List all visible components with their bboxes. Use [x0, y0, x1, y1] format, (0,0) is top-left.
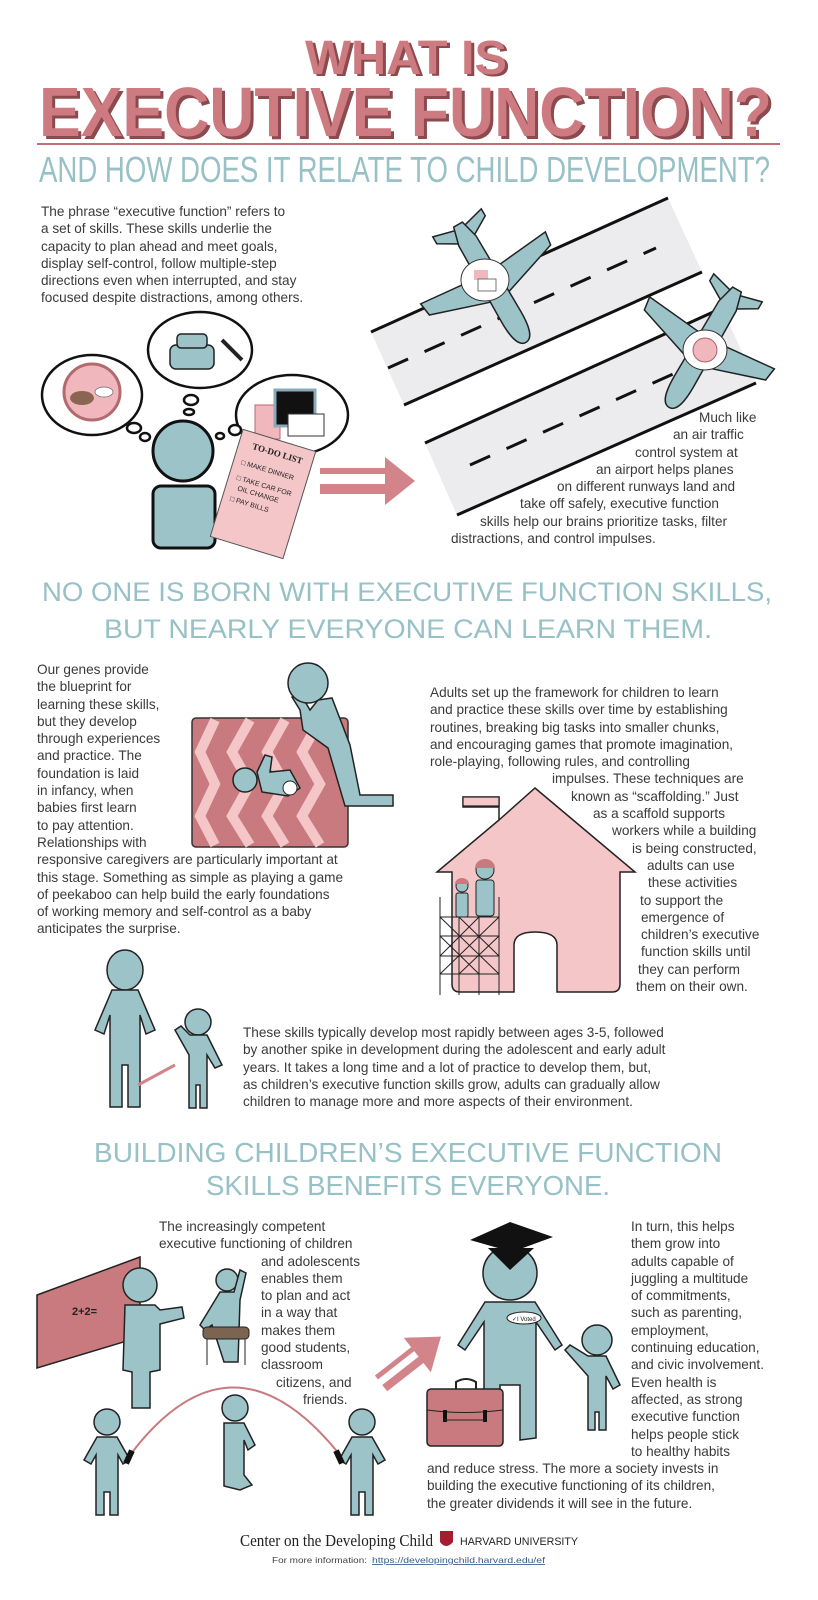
students text: friends.: [303, 1392, 348, 1407]
scaffolding text: these activities: [648, 875, 737, 890]
adults text: [427, 1219, 764, 1511]
footer logo: For more information:: [272, 1555, 367, 1565]
students text: [159, 1219, 360, 1407]
footer logo: Center on the Developing Child: [240, 1531, 433, 1550]
adults text: helps people stick: [631, 1427, 739, 1442]
adults text: adults capable of: [631, 1254, 734, 1269]
I voted badge: ✓I Voted: [512, 1317, 536, 1323]
students text: classroom: [261, 1357, 323, 1372]
scaffolding text: and practice these skills over time by establishing: [430, 702, 728, 717]
person thinking: [153, 421, 215, 548]
scaffolding text: Adults set up the framework for children to learn: [430, 685, 719, 700]
to-do list: TO-DO LIST: [251, 441, 304, 466]
icon: plate with food: [64, 364, 120, 420]
adults text: executive function: [631, 1409, 740, 1424]
ages text: years. It takes a long time and a lot of practice to develop them, but,: [243, 1060, 651, 1075]
scaffolding text: them on their own.: [636, 979, 748, 994]
teacher: [123, 1268, 184, 1408]
adults text: them grow into: [631, 1236, 720, 1251]
to-do list: [210, 429, 316, 559]
air traffic text: on different runways land and: [557, 479, 735, 494]
scaffolding text: to support the: [640, 893, 723, 908]
jump rope kids: [84, 1388, 385, 1515]
to-do list: □ PAY BILLS: [229, 496, 270, 514]
adults text: employment,: [631, 1323, 709, 1338]
ages text: by another spike in development during the adolescent and early adult: [243, 1042, 665, 1057]
scaffolding text: is being constructed,: [632, 841, 757, 856]
heading 2: NO ONE IS BORN WITH EXECUTIVE FUNCTION SKILLS,: [42, 577, 772, 607]
chalkboard: 2+2=: [72, 1306, 97, 1318]
scaffolding text: children’s executive: [641, 927, 759, 942]
air traffic text: skills help our brains prioritize tasks, filter: [480, 514, 727, 529]
adults text: to healthy habits: [631, 1444, 730, 1459]
to-do list: OIL CHANGE: [236, 485, 280, 505]
air traffic text: [451, 410, 756, 546]
briefcase: [427, 1379, 503, 1446]
intro text: capacity to plan ahead and meet goals,: [41, 239, 278, 254]
footer logo: [240, 1531, 579, 1565]
genes text: Our genes provide: [37, 662, 149, 677]
heading 3: BUILDING CHILDREN’S EXECUTIVE FUNCTION: [94, 1137, 722, 1168]
icon: monitor and bills: [255, 390, 324, 439]
adults text: such as parenting,: [631, 1305, 742, 1320]
genes text: in infancy, when: [37, 783, 133, 798]
adults text: and civic involvement.: [631, 1357, 764, 1372]
genes text: Relationships with: [37, 835, 147, 850]
heading 2: BUT NEARLY EVERYONE CAN LEARN THEM.: [104, 614, 712, 644]
graduation cap: [470, 1222, 553, 1252]
genes text: to pay attention.: [37, 818, 134, 833]
title: WHAT IS: [308, 34, 510, 87]
intro text: The phrase “executive function” refers to: [41, 204, 285, 219]
peekaboo illustration: [192, 663, 393, 847]
heading 3: SKILLS BENEFITS EVERYONE.: [206, 1170, 610, 1201]
scaffolding text: impulses. These techniques are: [552, 771, 744, 786]
adults text: Even health is: [631, 1375, 716, 1390]
ages text: as children’s executive function skills grow, adults can gradually allow: [243, 1077, 660, 1092]
icon: car and wrench: [170, 334, 242, 369]
genes text: responsive caregivers are particularly important at: [37, 852, 338, 867]
genes text: of working memory and self-control as a baby: [37, 904, 311, 919]
genes text: this stage. Something as simple as playing a game: [37, 870, 343, 885]
footer logo: https://developingchild.harvard.edu/ef: [372, 1555, 546, 1565]
intro text: focused despite distractions, among others.: [41, 290, 303, 305]
adults text: continuing education,: [631, 1340, 759, 1355]
to-do list: □ TAKE CAR FOR: [235, 475, 292, 498]
students text: executive functioning of children: [159, 1236, 352, 1251]
scaffolding text: known as “scaffolding.” Just: [571, 789, 738, 804]
students text: and adolescents: [261, 1254, 360, 1269]
adults text: the greater dividends it will see in the future.: [427, 1496, 692, 1511]
runways: [371, 198, 756, 515]
chalkboard: [37, 1257, 140, 1368]
intro text: directions even when interrupted, and stay: [41, 273, 296, 288]
house with scaffold: [437, 788, 635, 995]
scaffolding text: and encouraging games that promote imagination,: [430, 737, 733, 752]
icon: plane 2 badge: [683, 330, 727, 370]
adult and child brushing: [95, 950, 222, 1108]
genes text: through experiences: [37, 731, 160, 746]
scaffolding text: [430, 685, 759, 994]
arrow 1: [320, 457, 415, 505]
scaffolding text: they can perform: [638, 962, 740, 977]
students text: to plan and act: [261, 1288, 350, 1303]
genes text: [37, 662, 343, 936]
intro text: [41, 204, 303, 305]
air traffic text: take off safely, executive function: [520, 496, 719, 511]
arrow 2: [368, 1319, 454, 1401]
genes text: the blueprint for: [37, 679, 131, 694]
icon: plane 1: [395, 187, 588, 378]
students text: good students,: [261, 1340, 350, 1355]
scaffolding text: adults can use: [647, 858, 735, 873]
scaffolding text: role-playing, following rules, and controlling: [430, 754, 690, 769]
icon: plane 1 badge: [461, 259, 509, 301]
scaffolding text: workers while a building: [612, 823, 756, 838]
scaffolding text: as a scaffold supports: [593, 806, 725, 821]
ages text: [243, 1025, 666, 1109]
ages text: These skills typically develop most rapidly between ages 3-5, followed: [243, 1025, 664, 1040]
students text: citizens, and: [276, 1375, 352, 1390]
air traffic text: an air traffic: [673, 427, 744, 442]
adults text: and reduce stress. The more a society invests in: [427, 1461, 718, 1476]
adults text: building the executive functioning of its children,: [427, 1478, 715, 1493]
child holding hand: [565, 1325, 620, 1430]
genes text: learning these skills,: [37, 697, 159, 712]
adults text: affected, as strong: [631, 1392, 743, 1407]
students text: in a way that: [261, 1305, 337, 1320]
genes text: foundation is laid: [37, 766, 139, 781]
icon: plane 2: [607, 252, 800, 443]
heading 3: [94, 1137, 722, 1201]
scaffolding text: function skills until: [641, 944, 751, 959]
heading 2: [42, 577, 772, 644]
genes text: of peekaboo can help build the early foundations: [37, 887, 330, 902]
graduate adult: [458, 1246, 562, 1440]
adults text: In turn, this helps: [631, 1219, 735, 1234]
adults text: of commitments,: [631, 1288, 731, 1303]
genes text: but they develop: [37, 714, 137, 729]
title: [39, 32, 775, 154]
title: WHAT IS: [305, 32, 507, 85]
genes text: and practice. The: [37, 748, 142, 763]
thought bubbles: [42, 312, 348, 455]
students text: The increasingly competent: [159, 1219, 325, 1234]
to-do list: □ MAKE DINNER: [240, 459, 295, 482]
genes text: babies first learn: [37, 800, 137, 815]
genes text: anticipates the surprise.: [37, 921, 181, 936]
student at desk: [200, 1269, 249, 1365]
intro text: display self-control, follow multiple-step: [41, 256, 277, 271]
students text: makes them: [261, 1323, 335, 1338]
ages text: children to manage more and more aspects of their environment.: [243, 1094, 633, 1109]
scaffolding text: routines, breaking big tasks into smaller chunks,: [430, 720, 719, 735]
footer logo: HARVARD UNIVERSITY: [460, 1536, 579, 1548]
air traffic text: an airport helps planes: [596, 462, 734, 477]
air traffic text: distractions, and control impulses.: [451, 531, 656, 546]
intro text: a set of skills. These skills underlie the: [41, 221, 272, 236]
air traffic text: Much like: [699, 410, 756, 425]
scaffolding text: emergence of: [641, 910, 724, 925]
I voted badge: [507, 1312, 541, 1324]
students text: enables them: [261, 1271, 343, 1286]
adults text: juggling a multitude: [631, 1271, 748, 1286]
air traffic text: control system at: [635, 445, 738, 460]
